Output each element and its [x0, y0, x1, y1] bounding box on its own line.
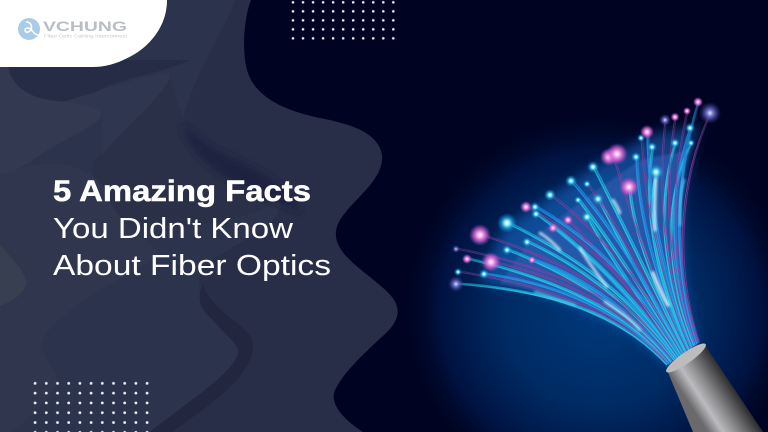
logo wordmark: VCHUNG [43, 18, 127, 34]
wave layer: lower dark band [158, 294, 252, 428]
cable cut end [663, 340, 709, 376]
logo tagline: Fiber Optic Cabling Interconnect [44, 34, 128, 38]
wave layer: central zone [0, 0, 280, 432]
wave layer: left lighter zone [0, 164, 160, 432]
wave layer: top dark band [7, 60, 190, 102]
decorative dot grid: top [288, 0, 398, 42]
light points: cyan [454, 123, 695, 279]
logo panel: white rounded corner [0, 0, 167, 67]
wave layer: top light patch [64, 86, 163, 152]
light points: violet [448, 102, 721, 292]
title line 3: About Fiber Optics [53, 250, 331, 282]
icon: logo circle [18, 18, 40, 40]
title line 1: 5 Amazing Facts [53, 175, 311, 208]
wave layer: dark crescent [186, 130, 297, 208]
wave layer: centre shade [92, 75, 280, 226]
fiber glow mass [480, 125, 700, 365]
fiber underlay fill [500, 150, 698, 365]
title [53, 175, 331, 282]
wave layer: upper-left lighter [0, 60, 102, 175]
cable jacket [667, 345, 763, 432]
fiber optic illustration [448, 97, 763, 432]
title line 2: You Didn't Know [53, 213, 293, 245]
bright strand highlights [535, 175, 684, 330]
panel: layered wave shape [0, 0, 400, 432]
light points: pink [462, 97, 703, 272]
background: blue glow behind fiber [400, 90, 768, 432]
decorative dot grid: bottom left [30, 378, 153, 432]
wave layer: left blob [0, 245, 26, 306]
fiber strands [456, 101, 712, 365]
